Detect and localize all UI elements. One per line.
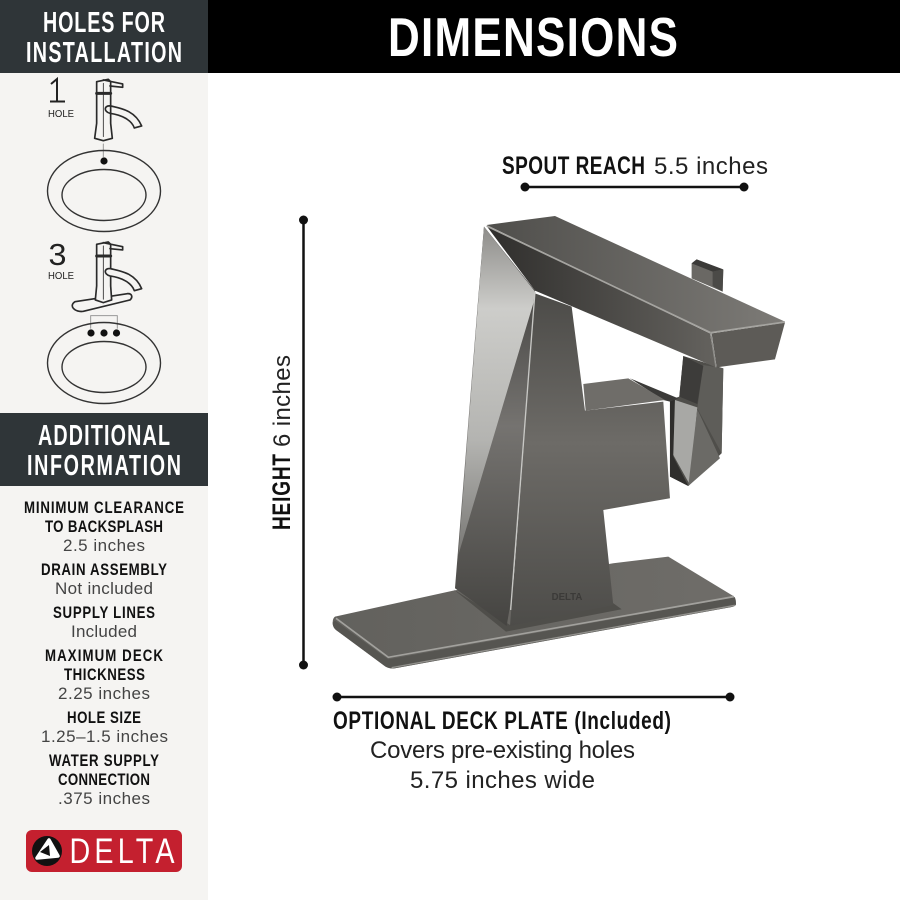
title: DIMENSIONS: [388, 6, 678, 68]
heading: holes for installation: HOLES FOR: [43, 7, 165, 39]
left polished face: [455, 227, 535, 626]
dimension: deck plate width: [332, 692, 734, 702]
label: 3 hole: 3: [48, 237, 66, 272]
dimension: spout reach: SPOUT REACH: [502, 151, 645, 180]
icon: faucet with deck plate: [72, 242, 142, 328]
text: drain assembly: [41, 561, 167, 598]
label: 1 hole: [48, 79, 74, 120]
text: supply lines: SUPPLY LINES: [53, 604, 155, 622]
dimension: spout reach: 5.5 inches: [654, 153, 768, 180]
text: optional deck plate: OPTIONAL DECK PLATE (Included): [333, 706, 671, 735]
body: [510, 293, 670, 626]
dimension: height: 6 inches: [269, 355, 296, 447]
spout: [487, 216, 785, 367]
text: maximum deck thickness: 2.25 inches: [58, 684, 150, 703]
heading: holes for installation: [0, 0, 208, 73]
text: minimum clearance: MINIMUM CLEARANCE: [24, 499, 184, 517]
text: drain assembly: Not included: [55, 579, 153, 598]
brand mark: DELTA: [552, 592, 582, 603]
text: optional deck plate: 5.75 inches wide: [410, 767, 595, 794]
text: maximum deck thickness: [45, 647, 163, 703]
logo: Delta: DELTA: [70, 831, 175, 871]
text: supply lines: Included: [71, 622, 137, 641]
icon: single hole faucet: [95, 79, 142, 157]
panel: additional information list: [24, 499, 184, 808]
icon: sink with one hole: [48, 150, 160, 232]
text: minimum clearance: TO BACKSPLASH: [45, 518, 163, 536]
dimension: height: HEIGHT: [267, 454, 296, 530]
text: hole size: HOLE SIZE: [67, 709, 141, 727]
faucet illustration: [333, 216, 785, 668]
text: supply lines: [53, 604, 155, 641]
title banner: [208, 0, 900, 73]
text: optional deck plate: Covers pre-existing holes: [370, 737, 635, 764]
text: maximum deck thickness: THICKNESS: [64, 666, 145, 684]
dimension: height: [267, 216, 308, 670]
heading: additional information: [0, 413, 208, 486]
label: 3 hole: [48, 237, 74, 282]
text: minimum clearance: [24, 499, 184, 555]
deck plate: [333, 557, 736, 668]
text: water supply connection: CONNECTION: [58, 771, 150, 789]
sidebar background: [0, 0, 208, 900]
heading: additional information: ADDITIONAL: [38, 420, 170, 452]
lever tab: [692, 259, 723, 292]
text: drain assembly: DRAIN ASSEMBLY: [41, 561, 167, 579]
text: minimum clearance: 2.5 inches: [63, 536, 145, 555]
label: 3 hole: HOLE: [48, 270, 74, 282]
heading: additional information: INFORMATION: [27, 450, 181, 482]
logo: Delta: [26, 830, 182, 872]
panel: three hole installation: [48, 237, 160, 404]
label: 1 hole: HOLE: [48, 108, 74, 120]
icon: sink with three holes: [48, 322, 160, 404]
dimension: spout reach: [502, 151, 768, 192]
text: water supply connection: WATER SUPPLY: [49, 752, 159, 770]
heading: holes for installation: INSTALLATION: [26, 37, 182, 69]
text: hole size: [41, 709, 168, 746]
text: maximum deck thickness: MAXIMUM DECK: [45, 647, 163, 665]
handle: [630, 356, 723, 486]
panel: one hole installation: [48, 79, 160, 232]
text: hole size: 1.25–1.5 inches: [41, 727, 168, 746]
text: water supply connection: [49, 752, 159, 808]
text: optional deck plate: [333, 706, 671, 794]
text: water supply connection: .375 inches: [58, 789, 150, 808]
